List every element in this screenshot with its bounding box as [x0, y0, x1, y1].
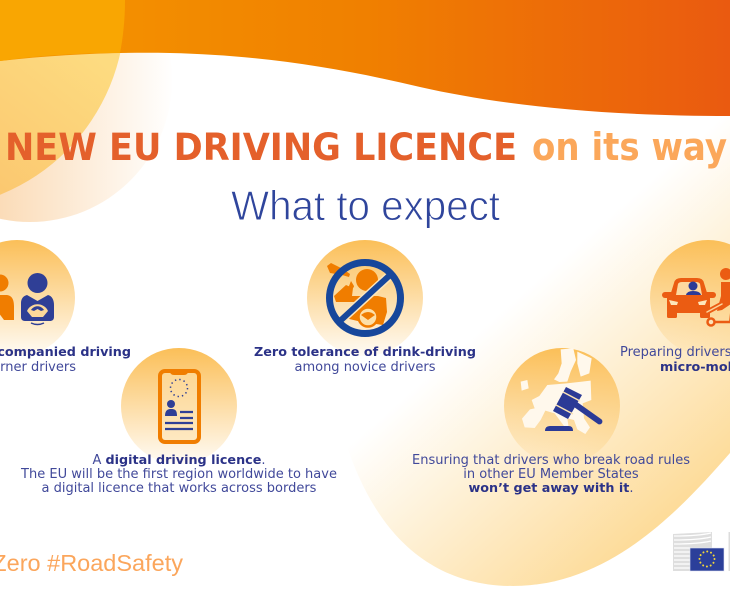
subtitle: What to expect: [231, 182, 500, 229]
text: digital driving licence: a digital licence that works across borders: [42, 481, 317, 496]
item: micro-mobility: [620, 240, 730, 375]
text: digital driving licence: The EU will be the first region worldwide to have: [20, 467, 337, 482]
text: cross-border enforcement: won’t get away with it.: [468, 481, 634, 496]
background circle: yellow: [0, 0, 125, 209]
text: zero tolerance: among novice drivers: [294, 360, 436, 375]
scooter rider: [707, 268, 730, 326]
icon: phone with licence: [121, 348, 237, 464]
gavel: [545, 387, 602, 431]
item: accompanied driving: [0, 240, 131, 375]
text: zero tolerance: Zero tolerance of drink-driving: [254, 345, 476, 360]
text: zero tolerance: [254, 345, 476, 375]
background circle: pale peach: [0, 0, 172, 222]
item: zero tolerance: [254, 240, 476, 375]
item: cross-border enforcement: [412, 348, 690, 496]
icon: Europe map with gavel: [504, 348, 620, 464]
yellow circle overlap on wave: [0, 0, 125, 61]
car: [662, 278, 716, 318]
icon: no drink-driving: [307, 240, 423, 356]
text: digital driving licence: A digital driving licence.: [92, 453, 266, 468]
text: micro-mobility: [620, 345, 730, 375]
icon: car and scooter rider: [650, 240, 730, 356]
text: accompanied driving: [0, 345, 131, 375]
top orange wave: [0, 0, 730, 116]
text: cross-border enforcement: Ensuring that drivers who break road rules: [412, 453, 690, 468]
title: main words: NEW EU DRIVING LICENCE: [5, 126, 517, 169]
European Commission logo: [673, 532, 730, 571]
text: cross-border enforcement: [412, 453, 690, 496]
background blob: lower right: [340, 110, 730, 586]
item: digital driving licence: [20, 348, 337, 496]
text: digital driving licence: [20, 453, 337, 496]
map of Europe: [521, 348, 592, 434]
icon: learner and accompanying driver: [0, 240, 75, 356]
title: [5, 125, 727, 169]
text: cross-border enforcement: in other EU Member States: [463, 467, 639, 482]
